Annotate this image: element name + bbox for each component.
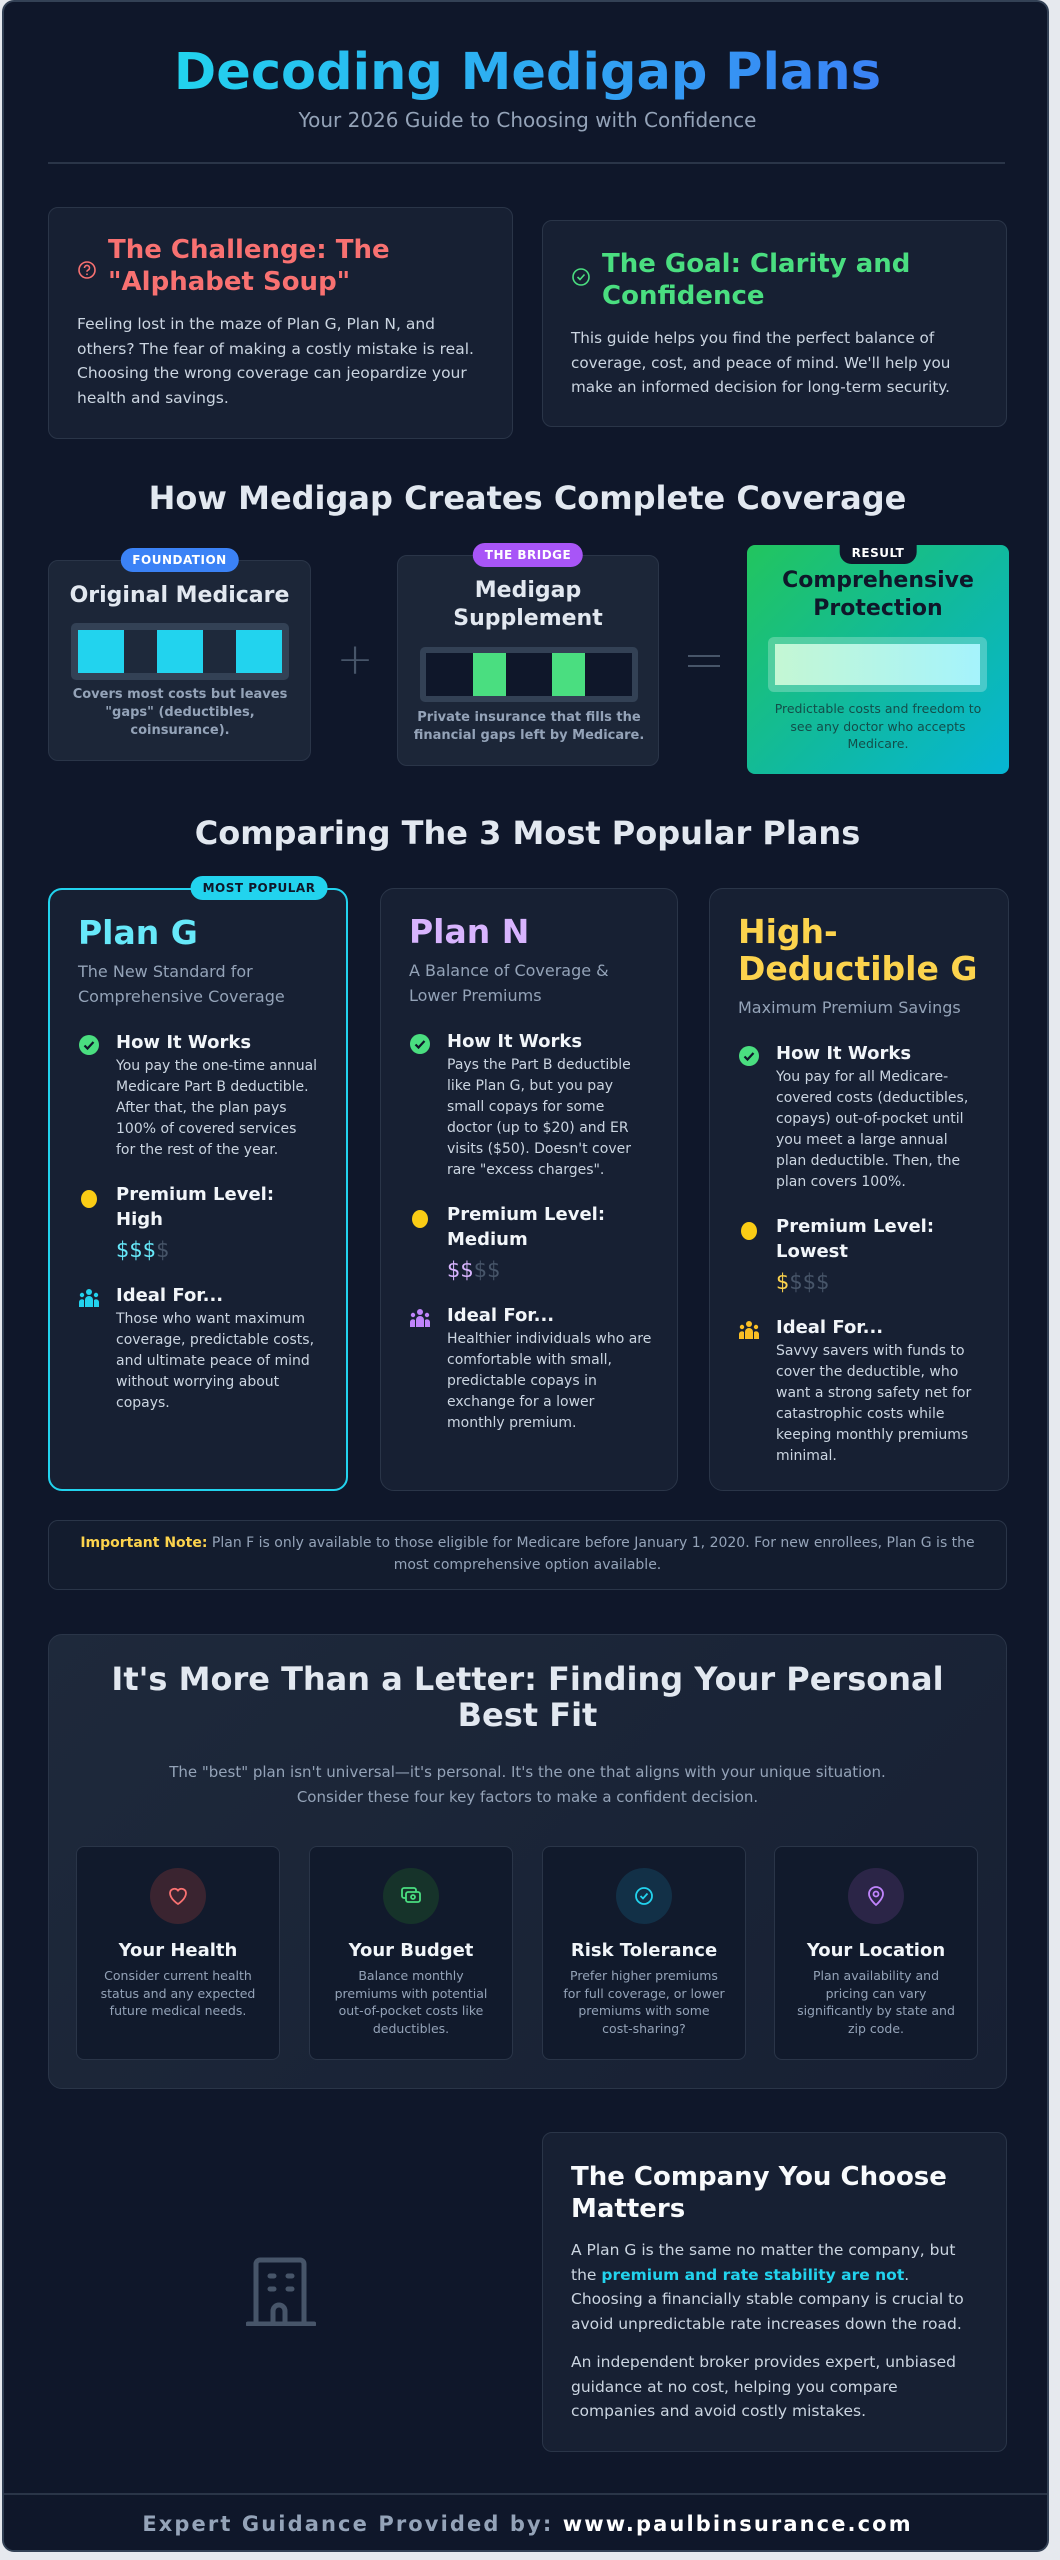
item: how it works: 100% of covered services [116, 1121, 296, 1137]
item: premium: Lowest [776, 1241, 848, 1262]
text: A Plan G is the same no matter the company, but [571, 2241, 955, 2259]
item: how it works [739, 1043, 968, 1190]
title: Comprehensive [782, 568, 974, 593]
icon: heart [150, 1868, 206, 1924]
icon: equals [688, 655, 720, 667]
item: how it works: plan covers 100%. [776, 1174, 906, 1190]
badge: the bridge [473, 543, 583, 567]
item: ideal for: Ideal For... [776, 1317, 883, 1338]
item: how it works: Medicare Part B deductible. [116, 1079, 309, 1095]
item: how it works: rare "excess charges". [447, 1162, 604, 1178]
item: premium: $$$$ [776, 1270, 829, 1294]
item: ideal for: catastrophic costs while [776, 1406, 944, 1422]
heading [111, 1660, 944, 1734]
factor: location: Plan availability and [813, 1968, 939, 1983]
text: goal: make an informed decision for long-term security. [571, 378, 950, 396]
text: the premium and rate stability are not. [571, 2266, 909, 2284]
panel: challenge [48, 207, 513, 439]
panel: plan n: A Balance of Coverage & Lower Premiums [409, 961, 609, 1005]
factor: health: Consider current health [104, 1968, 252, 1983]
text: Covers most costs but leaves "gaps" (deductibles, coinsurance). [73, 687, 287, 738]
item: how it works [79, 1032, 317, 1158]
factor: risk: Risk Tolerance [571, 1940, 717, 1961]
panel: medigap supplement [397, 555, 659, 766]
title: Supplement [453, 606, 603, 631]
item: how it works: How It Works [447, 1031, 582, 1052]
panel: plan g: Plan G [78, 913, 198, 952]
icon: shield check [616, 1868, 672, 1924]
item: premium: Premium Level: [776, 1216, 934, 1237]
item: premium: $$$$ [447, 1258, 500, 1282]
item: how it works: small copays for some [447, 1099, 604, 1115]
badge: most popular: MOST POPULAR [203, 881, 315, 895]
badge: result: RESULT [852, 546, 904, 560]
item: premium: Premium Level: [447, 1204, 605, 1225]
icon: plus: + [337, 634, 373, 685]
heading: It's More Than a Letter: Finding Your Personal [111, 1660, 944, 1698]
factor: location: Your Location [807, 1940, 945, 1961]
heading: comparing: Comparing The 3 Most Popular Plans [195, 814, 860, 852]
panel: company [542, 2132, 1007, 2452]
item: ideal for: predictable copays in [447, 1373, 597, 1389]
note box [48, 1520, 1007, 1590]
text: avoid unpredictable rate increases down the road. An independent broker provides expert, unbiased [571, 2314, 962, 2371]
item: ideal for: and ultimate peace of mind [116, 1353, 310, 1369]
item: how it works: Pays the Part B deductible [447, 1057, 631, 1073]
item: ideal for: comfortable with small, [447, 1352, 612, 1368]
item: premium [81, 1184, 274, 1262]
icon: check [572, 268, 590, 286]
text: goal: coverage, cost, and peace of mind. We'll help you [571, 354, 950, 372]
text: challenge: health and savings. [77, 388, 229, 406]
panel: plan g [48, 888, 348, 1491]
panel: best fit [48, 1634, 1007, 2089]
heading: challenge: "Alphabet Soup" [108, 267, 350, 297]
item: how it works: How It Works [116, 1032, 251, 1053]
item: how it works: you meet a large annual [776, 1132, 948, 1148]
factor: risk: cost-sharing? [602, 2021, 686, 2036]
item: ideal for: Ideal For... [447, 1305, 554, 1326]
item: how it works: How It Works [776, 1043, 911, 1064]
text: challenge: Feeling lost in the maze of Plan G, Plan N, and [77, 315, 435, 333]
factor: risk [542, 1846, 746, 2060]
heading [571, 2162, 947, 2224]
badge: foundation [120, 548, 239, 572]
item: how it works: copays) out-of-pocket until [776, 1111, 964, 1127]
item: premium: High [116, 1209, 163, 1230]
item: ideal for: Healthier individuals who are [447, 1331, 651, 1347]
factor: risk: Prefer higher premiums [570, 1968, 718, 1983]
item: ideal for [739, 1317, 972, 1464]
factor: budget: Your Budget [349, 1940, 473, 1961]
item: ideal for: Savvy savers with funds to [776, 1343, 965, 1359]
item: premium [412, 1204, 605, 1282]
item: ideal for [410, 1305, 651, 1431]
text: Private insurance that fills the financial gaps left by Medicare. [414, 710, 644, 743]
factor: location: significantly by state and [797, 2003, 955, 2018]
badge: the bridge: THE BRIDGE [485, 548, 571, 562]
text: challenge: others? The fear of making a costly mistake is real. [77, 340, 474, 358]
subtitle: Your 2026 Guide to Choosing with Confidence [299, 108, 756, 132]
panel: plan n: Plan N [409, 912, 529, 951]
item: how it works: for the rest of the year. [116, 1142, 278, 1158]
heading: challenge: The Challenge: The [108, 235, 390, 265]
factor: location [774, 1846, 978, 2060]
text: Choosing a financially stable company is crucial to [571, 2290, 964, 2308]
factor: health: status and any expected [101, 1986, 255, 2001]
item: ideal for: Ideal For... [116, 1285, 223, 1306]
item: ideal for: want a strong safety net for [776, 1385, 971, 1401]
item: ideal for: keeping monthly premiums [776, 1427, 968, 1443]
factor: health: future medical needs. [110, 2003, 246, 2018]
bar: gaps filled [420, 647, 638, 702]
item: ideal for: monthly premium. [447, 1415, 576, 1431]
panel: original medicare [48, 560, 311, 761]
item: ideal for: exchange for a lower [447, 1394, 594, 1410]
paragraph: The "best" plan isn't universal—it's personal. It's the one that aligns with your unique situation. [169, 1763, 886, 1781]
factor: risk: premiums with some [578, 2003, 710, 2018]
text: challenge: Choosing the wrong coverage can jeopardize your [77, 364, 467, 382]
text: companies and avoid costly mistakes. [571, 2402, 866, 2420]
item: ideal for: minimal. [776, 1448, 837, 1464]
factor: budget [309, 1846, 513, 2060]
bar: coverage [71, 623, 289, 680]
badge: foundation: FOUNDATION [132, 553, 227, 567]
panel: high-deductible g [709, 888, 1009, 1491]
item: how it works: doctor (up to $20) and ER [447, 1120, 629, 1136]
factor: health: Your Health [119, 1940, 237, 1961]
item: how it works: plan deductible. Then, the [776, 1153, 960, 1169]
item: how it works: like Plan G, but you pay [447, 1078, 613, 1094]
factor: budget: Balance monthly [358, 1968, 464, 1983]
factor: budget: out-of-pocket costs like [339, 2003, 483, 2018]
heading: goal [602, 249, 910, 311]
item: how it works: You pay for all Medicare- [776, 1069, 948, 1085]
title: Original Medicare [70, 583, 289, 608]
factor: budget: deductibles. [373, 2021, 449, 2036]
footer [4, 2493, 1051, 2554]
item: premium: Medium [447, 1229, 528, 1250]
panel: plan g: The New Standard for Comprehensive Coverage [78, 962, 285, 1006]
badge: result [840, 542, 916, 564]
item: premium: Premium Level: [116, 1184, 274, 1205]
panel: plan n [380, 888, 678, 1491]
factor: location: pricing can vary [826, 1986, 926, 2001]
factor: budget: premiums with potential [335, 1986, 487, 2001]
icon: question [78, 261, 96, 279]
badge: most popular [191, 876, 327, 900]
factor: health [76, 1846, 280, 2060]
text: goal [570, 329, 950, 396]
heading: goal: The Goal: Clarity and [602, 249, 910, 279]
text: guidance at no cost, helping you compare [571, 2378, 898, 2396]
item: how it works: visits ($50). Doesn't cover [447, 1141, 631, 1157]
title [453, 578, 603, 631]
bar: full coverage [768, 637, 987, 692]
item: ideal for: copays. [116, 1395, 170, 1411]
title [782, 568, 974, 621]
icon: pin [848, 1868, 904, 1924]
paragraph [169, 1763, 886, 1806]
panel: high-deductible g: High- [738, 912, 838, 951]
title: Medigap [475, 578, 581, 603]
note box: Important Note: Plan F is only available to those eligible for Medicare before January 1, 2020. For new enrollees, Plan G is the most comprehensive option available. [80, 1535, 975, 1572]
heading: The Company You Choose [571, 2162, 947, 2192]
heading: how medigap: How Medigap Creates Complete Coverage [149, 479, 906, 517]
factor: risk: for full coverage, or lower [563, 1986, 725, 2001]
item: how it works: covered costs (deductibles, [776, 1090, 968, 1106]
item: how it works [410, 1031, 631, 1178]
panel: high-deductible g: Maximum Premium Savings [738, 998, 961, 1017]
text: goal: This guide helps you find the perfect balance of [571, 329, 934, 347]
item: premium: $$$$ [116, 1238, 169, 1262]
text: Predictable costs and freedom to see any doctor who accepts Medicare. [775, 701, 981, 751]
panel: result [747, 545, 1009, 774]
panel: goal [542, 220, 1007, 427]
item: ideal for: cover the deductible, who [776, 1364, 958, 1380]
item: ideal for: coverage, predictable costs, [116, 1332, 314, 1348]
item: ideal for: Those who want maximum [116, 1311, 305, 1327]
text [571, 2241, 964, 2420]
item: how it works: After that, the plan pays [116, 1100, 287, 1116]
footer: Expert Guidance Provided by: www.paulbinsurance.com [142, 2512, 913, 2536]
title: Protection [813, 596, 943, 621]
heading: Best Fit [458, 1696, 597, 1734]
item: premium [741, 1216, 934, 1294]
title: Decoding Medigap Plans [174, 43, 881, 102]
heading: Matters [571, 2194, 685, 2224]
panel: high-deductible g: Deductible G [738, 949, 977, 988]
paragraph: Consider these four key factors to make a confident decision. [297, 1788, 758, 1806]
item: ideal for: without worrying about [116, 1374, 279, 1390]
icon: building [246, 2258, 316, 2326]
text: challenge [77, 315, 474, 406]
item: how it works: You pay the one-time annual [116, 1058, 317, 1074]
heading: goal: Confidence [602, 281, 765, 311]
item: ideal for [79, 1285, 314, 1411]
heading: challenge [108, 235, 390, 297]
icon: money [383, 1868, 439, 1924]
factor: location: zip code. [848, 2021, 904, 2036]
